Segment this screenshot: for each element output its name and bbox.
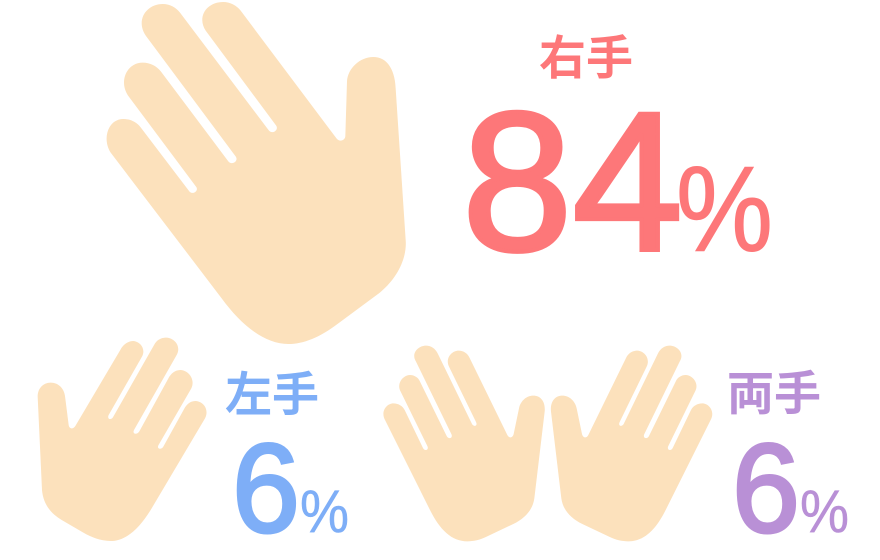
icon: large right hand xyxy=(107,2,406,344)
stat: right hand 84%: 84 xyxy=(462,71,683,292)
stat: left hand 6%: 6 xyxy=(232,418,300,559)
icon: left hand xyxy=(38,338,207,541)
stat: both hands 6%: % xyxy=(800,478,849,545)
icon: both hands xyxy=(383,346,712,541)
stat: both hands 6% xyxy=(732,418,849,559)
stat: right hand 84%: % xyxy=(676,141,773,277)
heading: left hand: 左手 xyxy=(225,356,319,425)
stat: left hand 6% xyxy=(232,418,349,559)
heading: right hand: 右手 xyxy=(539,20,633,88)
icon: left of pair xyxy=(383,346,545,541)
stat: both hands 6%: 6 xyxy=(732,418,800,559)
icon: right of pair xyxy=(551,346,712,541)
heading: both hands: 両手 xyxy=(727,355,821,424)
stat: left hand 6%: % xyxy=(300,478,349,545)
